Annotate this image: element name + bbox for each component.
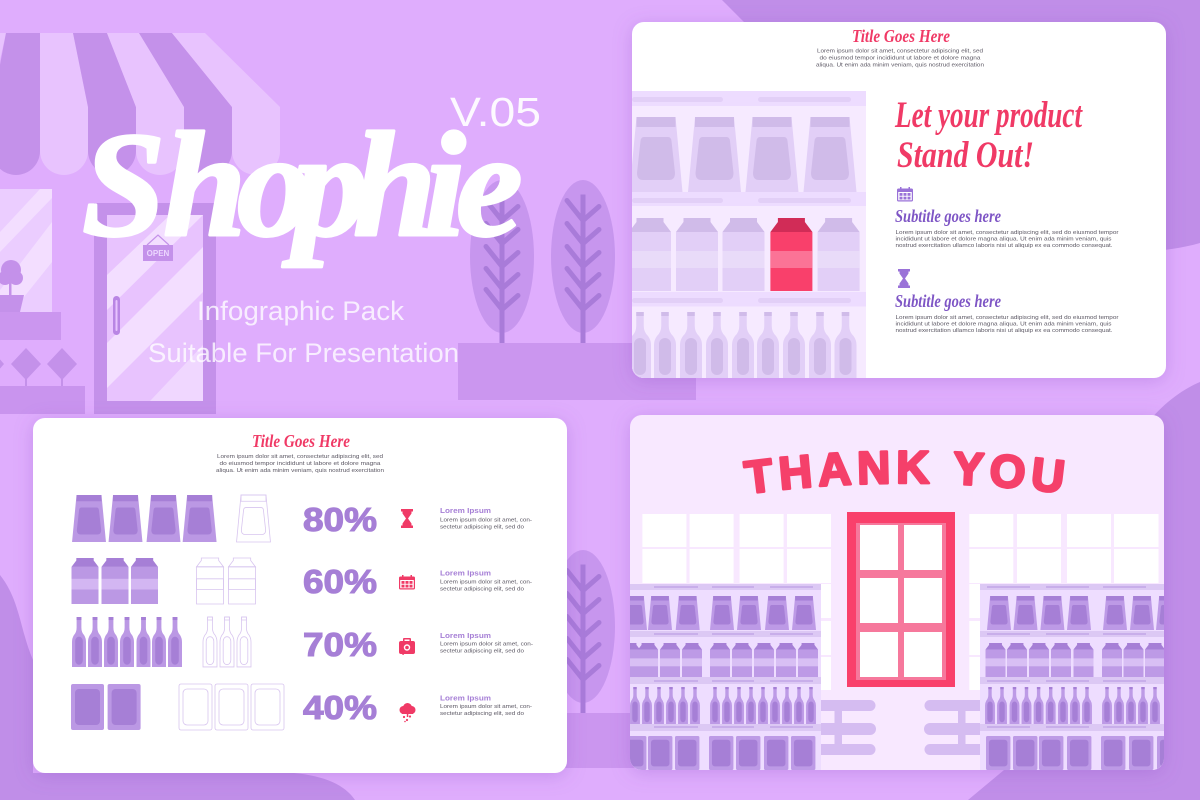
white wall windows [642,514,1158,690]
percent value: 40% [303,689,377,726]
panel: thank you [626,414,1166,778]
card intro text: aliqua. Ut enim ada minim veniam, quis nostrud exercitation [816,62,984,68]
background blob: top right [722,0,1200,262]
version label: V.05 [450,89,541,135]
outline cartons [196,558,256,604]
text block 1: nostrud exercitation ullamco laboris nisi ut aliquip ex ea commodo consequat. [896,243,1113,249]
window sill [0,312,61,340]
percent value: 60% [303,563,377,600]
planter box [458,343,696,400]
headline: Let your product [894,95,1083,136]
panel: product percentages [33,418,567,773]
label: Lorem Ipsum [440,506,491,515]
description [440,642,533,654]
card intro text [216,454,384,474]
bag row [630,117,856,192]
outline bottles [203,617,251,667]
card intro text: aliqua. Ut enim ada minim veniam, quis nostrud exercitation [216,468,384,474]
shelf illustration [629,91,866,378]
icon: cloud [400,703,416,722]
label: Lorem Ipsum [440,568,491,578]
background blob: bottom right [968,382,1200,800]
hedge planter [0,348,85,414]
open sign: OPEN [147,249,170,258]
icon: calendar [897,187,913,202]
percent value: 70% [303,626,377,663]
description [440,518,532,530]
tree right [551,180,615,346]
text block 1 [896,230,1119,249]
tree left [470,180,534,346]
text block 2: nostrud exercitation ullamco laboris nisi ut aliquip ex ea commodo consequat. [896,328,1113,334]
shelves right [980,584,1181,770]
row 1: bags 80% [72,495,532,542]
bench left [800,700,876,755]
text block 2: incididunt ut labore et dolore magna aliqua. Ut enim ada minim veniam, quis [896,322,1112,328]
card intro text [816,48,984,68]
icon: calendar [399,575,415,590]
card intro text: Lorem ipsum dolor sit amet, consectetur adipiscing elit, sed [817,48,983,54]
card intro text: Lorem ipsum dolor sit amet, consectetur adipiscing elit, sed [217,454,383,460]
description [440,704,532,717]
text block 1: incididunt ut labore et dolore magna aliqua. Ut enim ada minim veniam, quis [896,236,1112,242]
text block 2: Lorem ipsum dolor sit amet, consectetur adipiscing elit, sed do eiusmod tempor [896,315,1119,321]
awning [0,33,280,175]
background blob: bottom left [0,575,355,800]
shop window [0,189,52,312]
card title: Title Goes Here [252,431,350,451]
description: sectetur adipiscing elit, sed do [440,648,524,654]
subtitle 1: Subtitle goes here [895,206,1001,226]
description: Lorem ipsum dolor sit amet, con- [440,580,532,586]
headline: Stand Out! [897,135,1034,176]
highlighted red carton [770,218,812,291]
illustration: shop front [0,33,280,414]
illustration: lower tree [551,550,635,768]
percent value: 80% [303,501,377,538]
open sign [143,235,173,261]
headline [894,95,1083,176]
shelf boards [632,91,866,306]
text block 1: Lorem ipsum dolor sit amet, consectetur adipiscing elit, sed do eiusmod tempor [896,230,1119,236]
icon: hourglass [401,509,413,528]
label: Lorem Ipsum [440,694,491,702]
bench right [924,700,1000,755]
shelves left [620,584,821,770]
outline bag [237,495,270,542]
description: Lorem ipsum dolor sit amet, con- [440,518,532,524]
description: sectetur adipiscing elit, sed do [440,711,524,717]
text block 2 [896,315,1119,334]
carton row [629,218,860,291]
panel: let your product stand out [629,22,1166,378]
card intro text: do eiusmod tempor incididunt ut labore et dolore magna [220,461,381,467]
row 2: cartons 60% [71,558,532,604]
subtitle: infographic pack: Infographic Pack [197,296,405,326]
subtitle 2: Subtitle goes here [895,291,1001,311]
row 4: trays 40% [71,684,532,730]
icon: hourglass [898,269,910,288]
outline trays [179,684,284,730]
description: Lorem ipsum dolor sit amet, con- [440,642,533,648]
card title: Title Goes Here [852,26,950,46]
title: Shophie: Shophie [82,102,523,268]
description: sectetur adipiscing elit, sed do [440,524,524,530]
potted plant [0,260,24,312]
label: Lorem Ipsum [440,631,491,640]
description: sectetur adipiscing elit, sed do [440,586,524,592]
bottle row [629,312,856,378]
card intro text: do eiusmod tempor incididunt ut labore et dolore magna [820,56,981,62]
row 3: bottles 70% [72,617,533,667]
door [94,203,216,414]
icon: camera [399,638,415,655]
description: Lorem ipsum dolor sit amet, con- [440,704,532,710]
subtitle: suitable for presentation: Suitable For Presentation [148,338,459,368]
thank you arched heading: THANK YOU [742,450,1065,494]
description [440,580,532,592]
red door window [847,512,955,687]
illustration: trees and planter [458,180,696,400]
